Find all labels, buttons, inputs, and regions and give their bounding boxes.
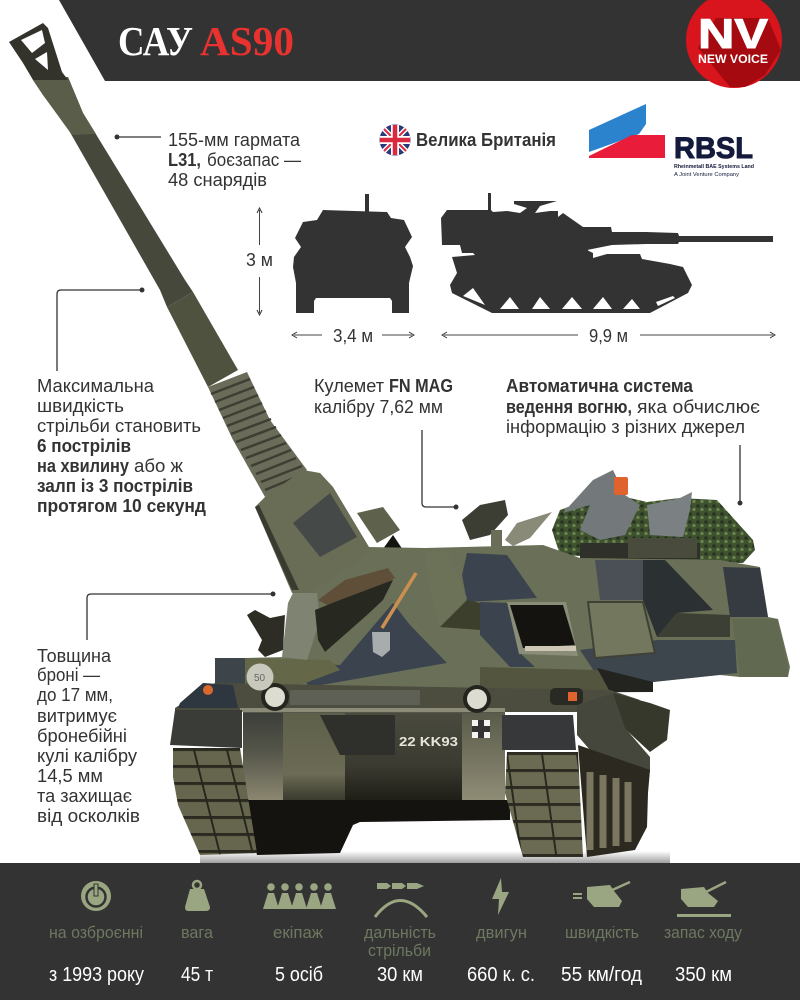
callout: armour: від осколків [37, 805, 140, 826]
callout: rate of fire: на хвилину [37, 455, 130, 476]
rear mount [357, 507, 405, 560]
stat: weight: вага [181, 923, 214, 942]
callout: rate of fire: або ж [134, 455, 184, 476]
title [118, 18, 294, 64]
stowage on right side [613, 693, 670, 752]
breech block [247, 610, 285, 657]
window opening [507, 602, 578, 656]
disc marking 50: 50 [254, 673, 266, 684]
bundle and camouflage net [552, 470, 755, 563]
stat: range [664, 882, 742, 986]
title: САУ [118, 18, 193, 64]
belly shadow [243, 800, 510, 855]
NV logo: NV [698, 10, 768, 57]
callout: armour: Товщина [37, 645, 112, 666]
checker marking [472, 720, 490, 738]
gun sleeve [167, 292, 238, 387]
mantlet box [255, 470, 372, 595]
stat: in service: на озброєнні [49, 923, 143, 942]
lamps [203, 683, 583, 713]
side skirt [577, 693, 650, 772]
footer panel [0, 863, 800, 1000]
bellows [208, 372, 307, 497]
front hull [243, 712, 505, 802]
callout: rate of fire: стрільби становить [37, 415, 201, 436]
callout: rate of fire: Максимальна [37, 375, 155, 396]
callout: gun [114, 129, 301, 190]
dimension: width 3,4 м [292, 325, 414, 346]
callout: armour: кулі калібру [37, 745, 138, 766]
NV logo: NEW VOICE [698, 52, 768, 66]
flag icon: United Kingdom [380, 124, 410, 156]
RBSL logo: RBSL [674, 132, 753, 165]
turret [215, 545, 790, 695]
machine gun [462, 500, 508, 548]
registration plate: 22 KK93 [399, 734, 458, 749]
stat: in service: з 1993 року [49, 964, 144, 986]
straps and camouflage [315, 568, 395, 652]
stat: crew [263, 883, 336, 986]
callout: machine gun: калібру 7,62 мм [314, 396, 443, 417]
dimension: height 3 м: 3 м [246, 249, 273, 270]
silhouette: front view [293, 194, 413, 313]
disc marking 50 [246, 664, 274, 690]
header band [59, 0, 800, 81]
callout: armour: бронебійні [37, 725, 127, 746]
stat: crew: 5 осіб [275, 964, 323, 986]
side hatch [588, 602, 655, 658]
dimension: width 3,4 м: 3,4 м [333, 325, 373, 346]
silhouette: side view [441, 193, 773, 313]
stat: range: запас ходу [664, 923, 742, 942]
RBSL logo [589, 104, 754, 178]
stat: firing range: 30 км [377, 964, 423, 986]
stat: range: 350 км [675, 964, 732, 986]
RBSL logo: A Joint Venture Company [674, 172, 739, 178]
stat: engine: двигун [476, 923, 527, 942]
stat: weight: 45 т [181, 964, 213, 986]
title: AS90 [200, 18, 294, 64]
callout: armour: витримує [37, 705, 117, 726]
callout: gun: боєзапас — [207, 149, 301, 170]
left track [173, 748, 257, 855]
callout: armour [37, 592, 276, 826]
callout: fire control system: яка обчислює [637, 396, 760, 417]
stat: firing range: дальність [364, 923, 436, 942]
stat: weight [181, 881, 214, 986]
rear stowage box [732, 619, 788, 677]
stat: speed: 55 км/год [561, 964, 642, 986]
callout: machine gun: Кулемет [314, 375, 385, 396]
hatch [505, 512, 552, 546]
stat: speed [561, 882, 642, 986]
dimension: length 9,9 м: 9,9 м [589, 325, 628, 346]
dimension: height 3 м [246, 208, 273, 315]
callout: machine gun [314, 375, 458, 510]
callout: rate of fire: 6 пострілів [37, 435, 131, 456]
callout: gun: 155-мм гармата [168, 129, 301, 150]
lower skirt band [480, 667, 620, 692]
front deck [175, 683, 640, 712]
callout: armour: та захищає [37, 785, 132, 806]
RBSL logo: Rheinmetall BAE Systems Land [674, 164, 754, 170]
callout: fire control system [506, 375, 760, 506]
stat: firing range [364, 883, 436, 986]
left mudguard [170, 710, 242, 748]
gun barrel [9, 23, 193, 307]
ground shadow [200, 851, 670, 863]
stat: in service [49, 881, 144, 986]
callout: gun: L31, [168, 149, 201, 170]
callout: fire control system: ведення вогню, [506, 396, 632, 417]
stat: crew: екіпаж [273, 923, 324, 942]
NV logo [686, 0, 782, 88]
side wedge [425, 550, 467, 627]
road wheels [578, 745, 650, 857]
country name: Велика Британія [416, 129, 556, 150]
callout: rate of fire: протягом 10 секунд [37, 495, 206, 516]
callout: rate of fire: залп із 3 пострілів [37, 475, 193, 496]
callout: armour: броні — [37, 664, 100, 685]
callout: fire control system: Автоматична система [506, 375, 694, 396]
camouflage patches [462, 553, 537, 602]
tool: pickaxe [372, 573, 416, 657]
right track [505, 752, 583, 857]
callout: gun: 48 снарядів [168, 169, 267, 190]
stat: engine: 660 к. с. [467, 964, 535, 986]
callout: armour: до 17 мм, [37, 684, 113, 705]
stat: speed: швидкість [565, 923, 639, 942]
stat: firing range: стрільби [368, 941, 431, 960]
callout: machine gun: FN MAG [389, 375, 453, 396]
gun mount [282, 593, 320, 660]
callout: rate of fire [37, 288, 206, 516]
callout: fire control system: інформацію з різних джерел [506, 416, 745, 437]
callout: rate of fire: швидкість [37, 395, 124, 416]
dimension: length 9,9 м [442, 325, 775, 346]
stat: engine [467, 878, 535, 986]
callout: armour: 14,5 мм [37, 765, 103, 786]
right mudguard [502, 715, 576, 750]
